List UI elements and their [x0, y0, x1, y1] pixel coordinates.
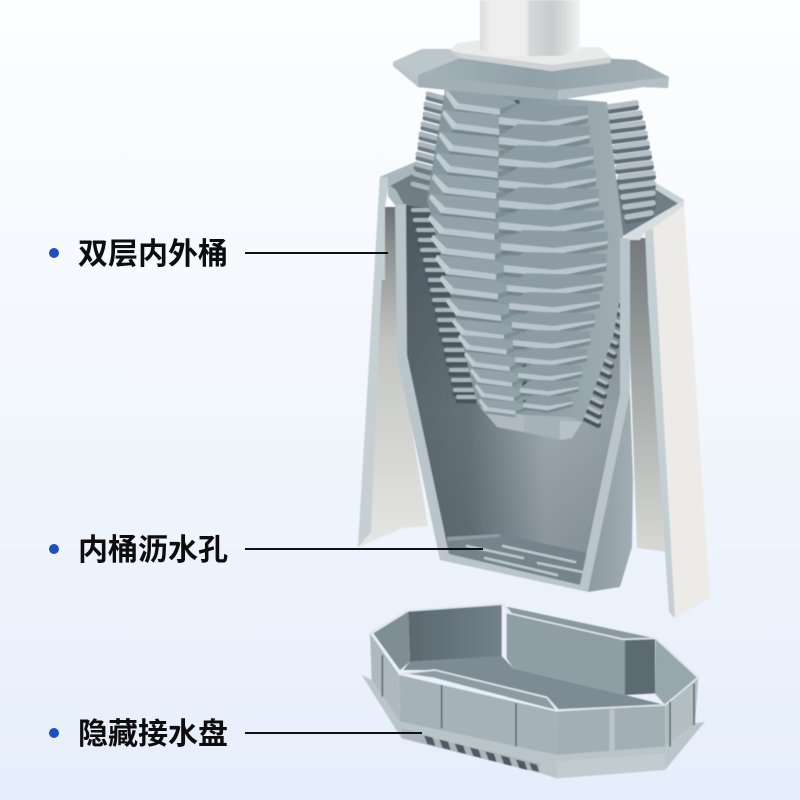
octagonal top plate [393, 49, 669, 100]
tray top rim highlight [370, 604, 698, 710]
leader line [245, 252, 388, 254]
white collar [450, 40, 611, 71]
central brush core [427, 90, 623, 440]
bullet [49, 544, 59, 554]
label text: 双层内外桶 [78, 238, 228, 271]
label: double-layer inner and outer bucket [49, 238, 388, 271]
hidden drip tray [362, 604, 705, 778]
dark centre seam [517, 100, 526, 410]
label: hidden drip tray [49, 718, 422, 751]
outer bucket right cut edge and panel [623, 200, 710, 618]
left column of fins [428, 90, 527, 417]
white handle pole [480, 0, 580, 56]
label: inner bucket drain holes [49, 534, 483, 567]
outer bucket left cut edge [377, 177, 404, 280]
right column of fins [499, 104, 608, 413]
left outer bucket wall [358, 177, 428, 547]
product illustration: exploded cutaway [358, 0, 710, 778]
label text: 内桶沥水孔 [78, 534, 228, 567]
inner bucket floor with drain slots [447, 534, 587, 585]
tray outer walls [370, 633, 698, 755]
leader line [245, 732, 422, 734]
inner bucket right body [588, 393, 633, 592]
bullet [49, 728, 59, 738]
tray wall ribs [382, 655, 694, 747]
outer bucket back rim [380, 163, 684, 236]
inner bucket cut rim [395, 204, 630, 592]
left comb bristles [413, 94, 476, 401]
right outer bucket inner face [626, 238, 667, 552]
tray flange and teeth [362, 675, 705, 778]
leader line [245, 548, 483, 550]
inner bucket interior [405, 205, 620, 585]
tray interior [373, 605, 697, 709]
right comb bristles [582, 103, 653, 425]
label text: 隐藏接水盘 [78, 718, 228, 751]
brush core bottom cap [480, 407, 582, 440]
bullet [49, 248, 59, 258]
